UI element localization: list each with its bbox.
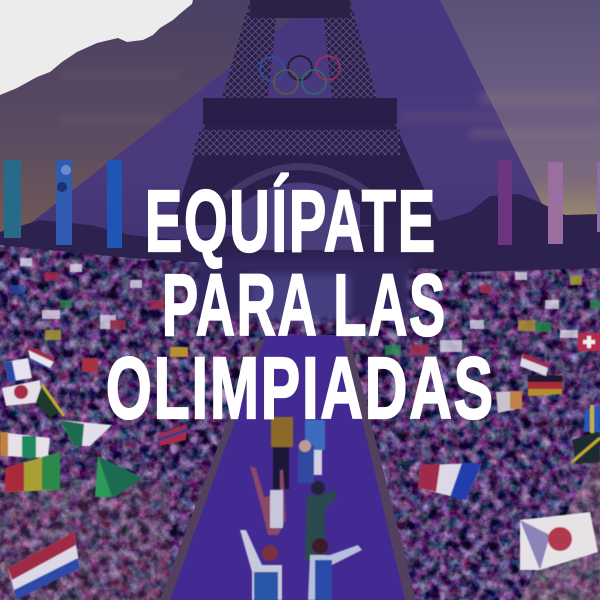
stage xyxy=(195,258,410,320)
sky background xyxy=(0,0,600,290)
distant trees xyxy=(0,194,600,300)
title line 1: EQUÍPATE xyxy=(145,173,437,270)
flags right side xyxy=(418,333,600,570)
crowd xyxy=(0,240,600,600)
walkway edges xyxy=(160,340,416,600)
banners xyxy=(4,160,600,248)
sky cloud bands xyxy=(60,70,600,138)
purple carpet xyxy=(170,335,405,600)
flags left side xyxy=(0,346,188,600)
torn paper corner xyxy=(0,0,193,95)
eiffel tower xyxy=(172,0,440,250)
title xyxy=(106,173,495,437)
central purple triangle overlay xyxy=(0,0,600,330)
performers xyxy=(240,417,362,600)
olympic rings xyxy=(260,56,340,94)
small background flags xyxy=(10,258,600,355)
